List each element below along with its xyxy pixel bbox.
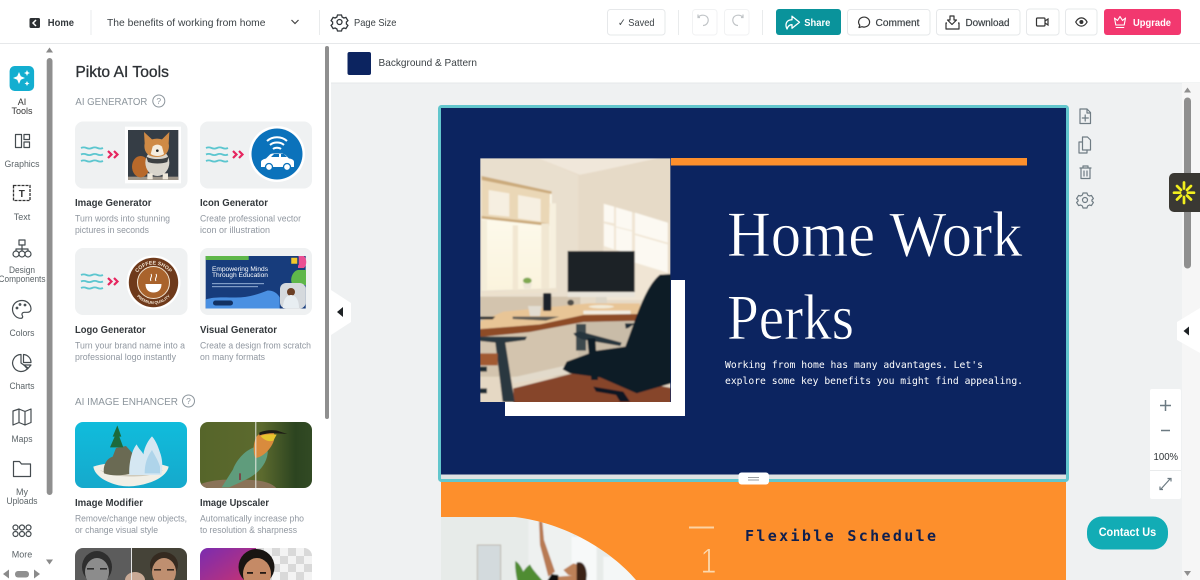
icon: duplicate page — [1079, 137, 1090, 153]
button: Comment: Comment — [876, 17, 920, 29]
canvas background — [331, 83, 1183, 580]
visual heading: Through Education — [212, 272, 269, 279]
zoom controls — [1150, 389, 1181, 499]
label: My Uploads: My — [16, 487, 28, 497]
widget badge — [1169, 173, 1200, 212]
intro text: explore some key benefits you might find appealing. — [725, 376, 1023, 387]
wave lines — [81, 147, 103, 162]
button: Saved: ✓ Saved — [618, 17, 655, 29]
title: Home Work Perks: Home Work — [727, 199, 1023, 271]
label: Text: Text — [14, 212, 31, 222]
label: AI Tools: Tools — [11, 106, 33, 116]
document title: The benefits of working from home — [107, 17, 266, 29]
icon: uploads folder — [14, 462, 30, 476]
icon: delete page — [1080, 166, 1091, 178]
label: Design Components: Components — [0, 274, 46, 284]
label: Logo Generator: professional logo instantly — [75, 352, 176, 362]
button: undo — [692, 10, 717, 35]
right panel collapse tab — [1177, 308, 1200, 353]
heading: AI Image Enhancer: AI IMAGE ENHANCER — [75, 397, 178, 408]
zoom level: 100% — [1154, 452, 1178, 463]
title: Home Work Perks — [727, 199, 1023, 354]
label: Logo Generator — [75, 324, 185, 362]
label: AI Tools — [11, 97, 33, 116]
heading: Pikto AI Tools: Pikto AI Tools — [75, 64, 169, 81]
page 1: selected slide — [440, 106, 1068, 480]
top toolbar — [0, 0, 1200, 44]
label: AI Tools: AI — [18, 97, 26, 107]
left panel collapse tab — [331, 290, 351, 335]
navy background — [441, 108, 1066, 474]
page drag handle — [738, 472, 769, 484]
label: My Uploads — [6, 487, 38, 506]
card: photo colorizer — [75, 548, 187, 580]
button: Comment — [848, 10, 930, 35]
desk — [477, 303, 640, 330]
lower wall — [477, 297, 580, 377]
label: Image Generator: pictures in seconds — [75, 225, 149, 235]
photo: home office — [477, 155, 674, 405]
label: Charts: Charts — [10, 381, 35, 391]
icon: graphics — [16, 134, 30, 148]
label: Graphics: Graphics — [4, 159, 40, 169]
label: Background & Pattern: Background & Pattern — [378, 57, 477, 69]
visual heading — [212, 266, 269, 279]
button: Contact Us — [1087, 516, 1168, 550]
icon: coffee shop logo — [126, 256, 180, 310]
page 2: orange slide — [437, 482, 1066, 580]
zoom in — [1160, 400, 1171, 411]
button: redo — [724, 10, 749, 35]
photo: yoga — [441, 517, 636, 580]
icon: text — [14, 186, 30, 200]
label: Visual Generator: Visual Generator — [200, 324, 277, 336]
heading: Flexible Schedule: Flexible Schedule — [745, 527, 936, 545]
icon: page size gear — [331, 15, 348, 31]
card: Icon Generator — [200, 122, 312, 188]
card: Image Modifier — [75, 422, 187, 488]
sun patches — [603, 203, 668, 300]
label: Image Upscaler: Automatically increase pho — [200, 514, 304, 524]
button: Share: Share — [804, 17, 830, 29]
label: Icon Generator: Icon Generator — [200, 197, 268, 209]
button: Saved — [608, 10, 665, 35]
label: Logo Generator: Turn your brand name into a — [75, 340, 185, 350]
label: Image Generator: Image Generator — [75, 197, 152, 209]
window — [482, 193, 552, 290]
icon: add page — [1080, 109, 1090, 124]
label: Colors: Colors — [10, 328, 35, 338]
label: Image Upscaler: Image Upscaler — [200, 497, 269, 509]
office chair — [563, 274, 674, 393]
button: video — [1026, 9, 1059, 35]
icon: maps — [13, 409, 31, 425]
arrows — [108, 151, 118, 158]
label: Page Size: Page Size — [354, 17, 397, 29]
fit to screen — [1160, 478, 1171, 490]
card: Image Generator — [75, 122, 188, 188]
sidebar scrollbar — [3, 48, 53, 578]
label: Image Modifier: or change visual style — [75, 525, 158, 535]
label: Home: Home — [48, 17, 74, 29]
selection border — [440, 106, 1068, 480]
card: background remover — [200, 548, 312, 580]
label: Icon Generator — [200, 197, 301, 235]
floor — [512, 372, 670, 402]
intro text: Working from home has many advantages. Let's — [725, 360, 983, 371]
button: Upgrade: Upgrade — [1133, 17, 1171, 29]
orange accent bar — [671, 158, 1027, 166]
background swatch — [348, 52, 371, 75]
label: Maps: Maps — [12, 434, 33, 444]
button: Upgrade — [1104, 9, 1181, 35]
label: Visual Generator: Create a design from scratch — [200, 340, 311, 350]
page action icons — [1077, 109, 1093, 208]
label: Visual Generator — [200, 324, 311, 362]
icon: coffee shop logo: PREMIUM QUALITY — [137, 294, 170, 304]
icon: page settings — [1077, 193, 1093, 208]
step number — [689, 526, 716, 580]
right scrollbar — [1182, 83, 1200, 580]
button: Download — [936, 10, 1020, 35]
desk legs — [477, 337, 527, 402]
heading: AI Generator: AI GENERATOR — [75, 97, 147, 108]
label: Visual Generator: on many formats — [200, 352, 265, 362]
icon: more — [13, 525, 31, 536]
button: Share — [776, 9, 841, 35]
label: Image Modifier — [75, 497, 187, 535]
label: Image Generator — [75, 197, 170, 235]
monitor — [568, 251, 635, 292]
icon: chevron — [292, 20, 298, 24]
label: Icon Generator: Create professional vector — [200, 214, 301, 224]
step number: 1 — [700, 542, 716, 580]
label: Logo Generator: Logo Generator — [75, 324, 146, 336]
label: Design Components: Design — [9, 265, 35, 275]
panel scrollbar — [325, 46, 329, 419]
icon: colors — [12, 300, 31, 318]
panel: Pikto AI Tools — [75, 46, 329, 580]
label: Icon Generator: icon or illustration — [200, 225, 270, 235]
label: Image Modifier: Remove/change new objects, — [75, 514, 187, 524]
button: Contact Us: Contact Us — [1099, 525, 1156, 539]
icon: connected car — [249, 126, 305, 182]
card: Image Upscaler — [200, 422, 312, 488]
label: Image Upscaler: to resolution & sharpness — [200, 525, 297, 535]
heading: AI Image Enhancer: ? — [186, 396, 191, 406]
button: Download: Download — [966, 17, 1010, 29]
label: Image Modifier: Image Modifier — [75, 497, 143, 509]
heading: AI Generator: ? — [156, 96, 161, 106]
icon: home back — [30, 18, 40, 28]
label: My Uploads: Uploads — [6, 496, 38, 506]
mug and tablet — [528, 306, 541, 316]
label: More: More — [12, 550, 32, 560]
card: Logo Generator — [75, 248, 188, 315]
icon: AI tools — [10, 66, 34, 91]
label: Image Upscaler — [200, 497, 304, 535]
button: preview eye — [1066, 9, 1097, 35]
picture: corgi — [125, 127, 181, 183]
icon: design components — [13, 240, 31, 257]
card: Visual Generator — [200, 248, 312, 315]
visual heading: Empowering Minds — [212, 266, 268, 273]
left tool sidebar — [0, 44, 56, 580]
intro text — [725, 360, 1023, 387]
icon: coffee shop logo: COFFEE SHOP — [135, 260, 172, 272]
white offset frame — [505, 280, 685, 416]
icon: charts — [13, 354, 31, 371]
icon: text: T — [19, 189, 25, 200]
title: Home Work Perks: Perks — [727, 282, 854, 354]
background and pattern bar — [331, 44, 1200, 84]
zoom out — [1161, 430, 1170, 432]
label: Image Generator: Turn words into stunning — [75, 214, 170, 224]
slider line — [255, 422, 256, 488]
label: Design Components — [0, 265, 46, 284]
